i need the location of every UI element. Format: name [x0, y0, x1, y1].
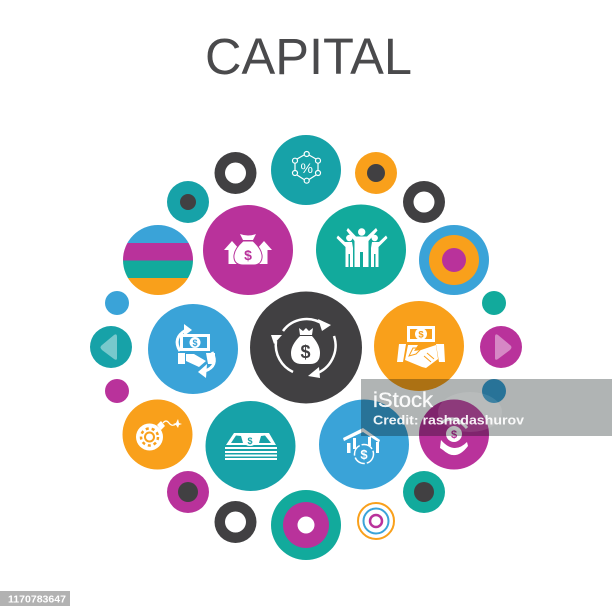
decorative dot: magenta bottom left	[167, 471, 209, 513]
panel: money bag with arrows	[203, 205, 293, 295]
previous arrow button	[90, 326, 132, 368]
decorative dot: orange top right	[355, 152, 397, 194]
image id tag: 1170783647	[8, 594, 66, 606]
icon: stack of banknotes: $	[247, 436, 253, 446]
panel: house and growth	[319, 400, 409, 490]
panel: central capital circle	[250, 292, 362, 404]
decorative dot: teal top left	[167, 181, 209, 223]
decorative ring: dark top left	[214, 152, 256, 194]
panel: deal orange	[374, 301, 464, 391]
panel: banknote exchange	[148, 304, 238, 394]
panel: percent network	[271, 135, 341, 205]
icon: money bag with cycle arrows: $	[300, 342, 311, 362]
watermark logo: iStock	[373, 389, 434, 412]
icon: house chart with dollar coin: $	[360, 447, 368, 462]
watermark band	[361, 379, 612, 436]
icon: percent network: %	[300, 160, 313, 176]
watermark credit: Credit: rashadashurov	[373, 414, 524, 428]
icon: banknote and handshake with arrows: $	[192, 338, 198, 348]
icon: bomb with gear	[136, 419, 182, 450]
icon: three people with raised arms	[336, 228, 388, 267]
small blue dot left	[105, 291, 129, 315]
small magenta dot left	[105, 379, 129, 403]
panel: coin circulation	[419, 400, 489, 470]
title: CAPITAL	[205, 28, 412, 85]
concentric target small	[358, 503, 394, 539]
decorative circle: teal magenta white bottom	[271, 490, 341, 560]
panel: team	[316, 204, 406, 294]
striped circle	[123, 225, 193, 295]
image id tag	[0, 591, 70, 606]
icon: money bag with up arrows: $	[244, 247, 252, 263]
next arrow button	[480, 326, 522, 368]
icon: coin with arrows: $	[451, 429, 457, 441]
decorative ring: dark bottom left	[214, 501, 256, 543]
decorative dot: teal bottom right	[403, 471, 445, 513]
decorative ring: dark top right	[403, 181, 445, 223]
icon: banknote above handshake: $	[418, 330, 424, 340]
target circle: blue orange magenta	[419, 225, 489, 295]
panel: bomb	[122, 400, 192, 470]
small teal dot right	[482, 291, 506, 315]
small blue dot right	[482, 379, 506, 403]
panel: cash stack	[206, 401, 296, 491]
